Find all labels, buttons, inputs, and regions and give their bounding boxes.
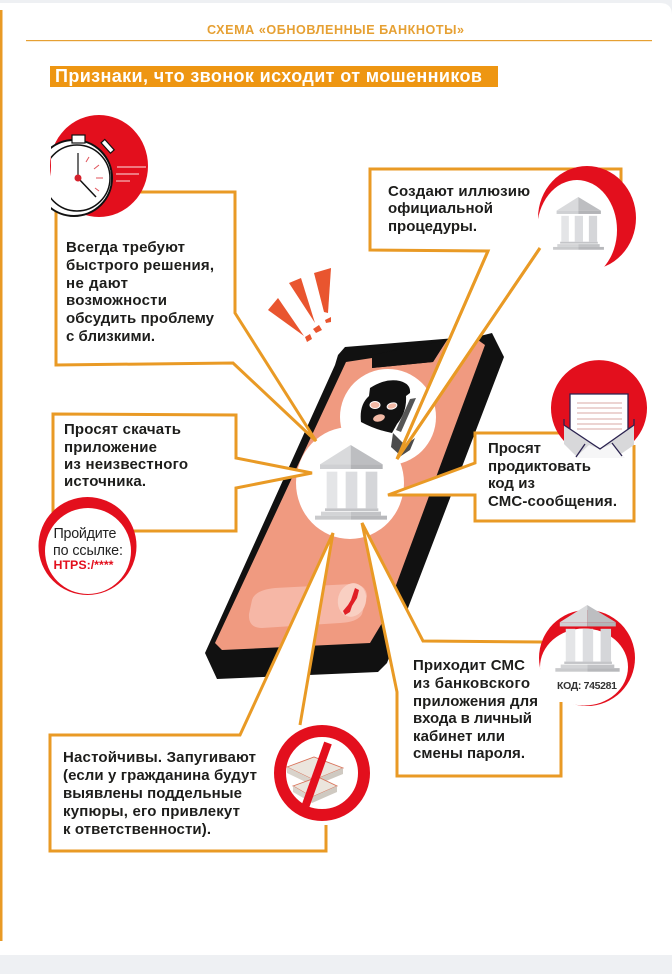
text: quick decision: с близкими. xyxy=(66,328,155,345)
text: quick decision: не дают xyxy=(66,275,128,292)
illustration: masked caller xyxy=(361,248,540,459)
icon: exclamation marks xyxy=(268,268,331,342)
text: quick decision: возможности xyxy=(66,292,167,309)
text: quick decision xyxy=(66,239,215,345)
text: quick decision: Всегда требуют xyxy=(66,239,185,256)
text: SMS code xyxy=(488,440,617,510)
text: official procedure: процедуры. xyxy=(388,218,477,235)
icon: link badge: Пройдите xyxy=(54,526,117,542)
text: SMS code: код из xyxy=(488,475,535,492)
header: СХЕМА «ОБНОВЛЕННЫЕ БАНКНОТЫ» xyxy=(207,23,464,37)
text: persistent threats: Настойчивы. Запугивают xyxy=(63,749,256,766)
text: official procedure: официальной xyxy=(388,200,493,217)
text: bank app SMS: смены пароля. xyxy=(413,745,525,762)
text: unknown app: из неизвестного xyxy=(64,456,188,473)
text: bank app SMS: кабинет или xyxy=(413,728,505,745)
text: official procedure xyxy=(388,183,530,235)
text: bank app SMS: входа в личный xyxy=(413,710,532,727)
text: persistent threats: выявлены поддельные xyxy=(63,785,242,802)
text: unknown app: Просят скачать xyxy=(64,421,181,438)
text: persistent threats xyxy=(63,749,257,838)
text: bank app SMS: Приходит СМС xyxy=(413,657,525,674)
icon: envelope xyxy=(551,360,647,458)
text: official procedure: Создают иллюзию xyxy=(388,183,530,200)
callout: bank app SMS xyxy=(362,523,635,776)
text: persistent threats: к ответственности). xyxy=(63,821,211,838)
icon: bank code badge: КОД: 745281 xyxy=(557,680,617,692)
smartphone illustration xyxy=(205,333,504,679)
callout: persistent threats xyxy=(50,533,364,851)
text: bank app SMS: из банковского xyxy=(413,675,530,692)
text: SMS code: СМС-сообщения. xyxy=(488,493,617,510)
text: SMS code: продиктовать xyxy=(488,458,591,475)
text: SMS code: Просят xyxy=(488,440,541,457)
text: bank app SMS xyxy=(413,657,538,762)
icon: link badge xyxy=(38,497,136,595)
text: bank app SMS: приложения для xyxy=(413,693,538,710)
callout: official procedure xyxy=(370,166,636,459)
text: unknown app: источника. xyxy=(64,473,146,490)
icon: link badge: по ссылке: xyxy=(53,543,123,559)
title: Признаки, что звонок исходит от мошенников xyxy=(55,66,482,86)
icon: stopwatch xyxy=(50,115,148,217)
text: quick decision: обсудить проблему xyxy=(66,310,215,327)
text: persistent threats: купюры, его привлекут xyxy=(63,803,240,820)
text: quick decision: быстрого решения, xyxy=(66,257,214,274)
icon: central bank xyxy=(315,445,387,520)
callout: unknown app xyxy=(38,414,312,595)
icon: banned money xyxy=(280,731,364,815)
icon: link badge: HTPS:/**** xyxy=(54,560,114,572)
icon: bank code badge xyxy=(539,605,635,706)
callout: SMS code xyxy=(388,360,647,521)
callout: quick decision xyxy=(36,115,316,441)
icon: crescent bank xyxy=(537,166,636,280)
text: persistent threats: (если у гражданина будут xyxy=(63,767,257,784)
text: unknown app: приложение xyxy=(64,439,157,456)
text: unknown app xyxy=(64,421,188,490)
